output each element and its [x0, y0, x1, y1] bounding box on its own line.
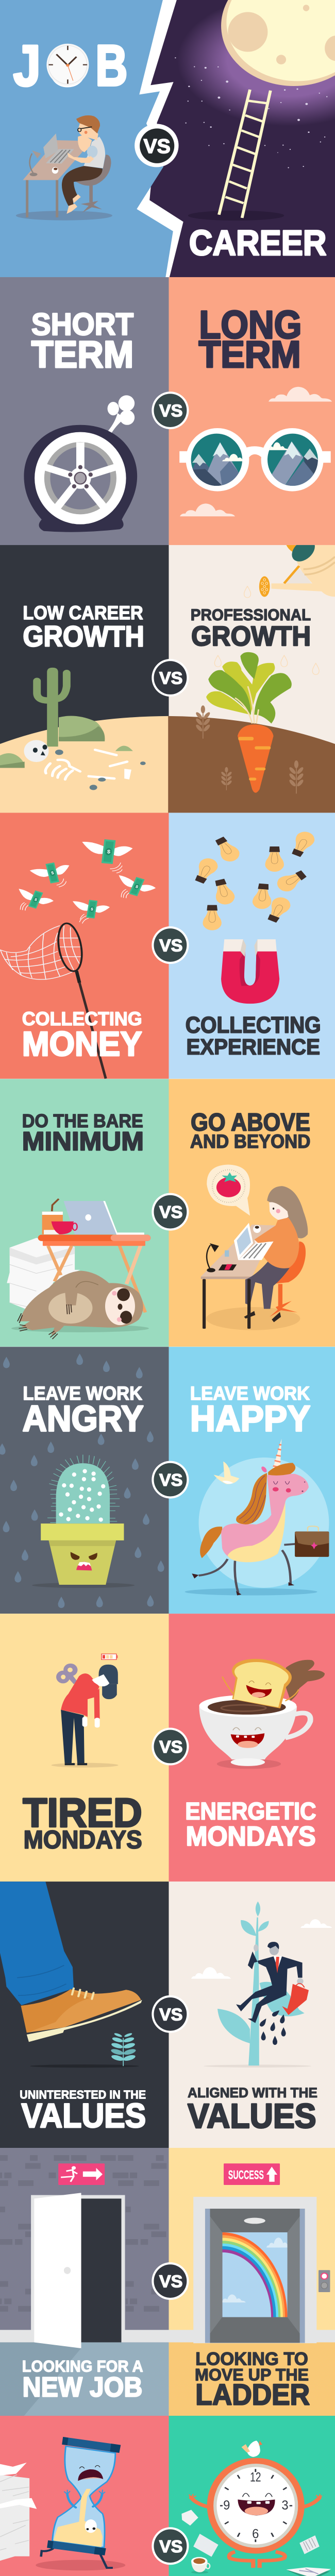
- vs badge: VS: [159, 668, 182, 688]
- heading: short term: SHORT: [31, 308, 133, 342]
- vs badge: VS: [159, 2536, 182, 2556]
- heading: leave work angry: [23, 1382, 144, 1439]
- illustration: businessman climbing plant: [236, 1942, 309, 2023]
- icon: jeans leg: [0, 1882, 74, 2005]
- heading: low career growth: LOW CAREER: [23, 602, 143, 623]
- wheat sprouts: [195, 705, 305, 793]
- panel: bare minimum vs above and beyond: [0, 1079, 335, 1347]
- vs badge: VS: [159, 2272, 182, 2291]
- stars: [175, 57, 327, 168]
- rain drops: [0, 1353, 164, 1608]
- exit sign: [58, 2163, 105, 2185]
- vs badge: [152, 926, 189, 964]
- heading: leave work angry: ANGRY: [23, 1399, 144, 1439]
- clouds: [191, 1919, 332, 1979]
- icon: flying money: [13, 837, 158, 924]
- heading: short term: TERM: [31, 333, 133, 376]
- heading: uninterested in the values: VALUES: [21, 2097, 146, 2135]
- desert ground: [0, 716, 169, 813]
- illustration: tired wind-up person: [51, 1664, 119, 1768]
- heading: looking to move up the ladder: [195, 2349, 310, 2411]
- icon: low battery: [102, 1654, 118, 1659]
- paper stack: [7, 1238, 80, 1314]
- icon: shoe: [21, 1988, 142, 2042]
- heading: looking to move up the ladder: MOVE UP THE: [195, 2365, 309, 2384]
- heading: tired mondays: TIRED: [23, 1790, 142, 1836]
- icon: small plant: [110, 2032, 137, 2066]
- heading: professional growth: [191, 606, 311, 652]
- heading: do the bare minimum: MINIMUM: [22, 1127, 144, 1156]
- heading: long term: [199, 303, 301, 376]
- paper stack: [0, 2463, 37, 2561]
- heading: collecting money: [22, 1008, 142, 1063]
- heading: job: J: [13, 34, 41, 98]
- heading: energetic mondays: [185, 1798, 316, 1852]
- panel: tired mondays vs energetic mondays: [0, 1614, 335, 1882]
- illustration: woman at desk: [201, 1186, 308, 1330]
- heading: job: [13, 33, 127, 98]
- panel: low career growth vs professional growth: [0, 536, 335, 813]
- icon: horseshoe magnet: [221, 939, 279, 1004]
- moon glow: [181, 10, 335, 124]
- icon: running hourglass: [36, 2437, 125, 2570]
- heading: go above and beyond: [190, 1109, 310, 1152]
- ground shadow: [204, 2065, 311, 2067]
- floating papers and coffee cup: [181, 2510, 331, 2576]
- heading: looking to move up the ladder: LOOKING TO: [195, 2349, 308, 2369]
- icon: happy clock: 12: [250, 2470, 261, 2484]
- icon: tomato timer speech bubble: [207, 1164, 250, 1216]
- icon: light bulbs: [191, 829, 317, 930]
- vs badge: VS: [159, 401, 182, 420]
- water drops: [214, 586, 319, 674]
- heading: uninterested in the values: UNINTERESTED IN THE: [20, 2089, 146, 2102]
- panel: leave work angry vs happy: [0, 1347, 335, 1614]
- icon: ladder: [219, 90, 271, 218]
- illustration: man at desk: [16, 115, 112, 221]
- icon: moon: [221, 0, 335, 86]
- heading: collecting money: MONEY: [22, 1025, 142, 1063]
- wall bricks: [0, 2155, 166, 2312]
- icon: happy clock: 6: [252, 2527, 259, 2541]
- heading: job: O: [48, 34, 88, 98]
- heading: looking for a new job: NEW JOB: [23, 2371, 142, 2402]
- vs badge: [152, 2262, 189, 2300]
- vs badge: [152, 392, 189, 429]
- icon: happy clock: 3: [281, 2498, 289, 2513]
- icon: angry cactus in pot: [32, 1455, 135, 1588]
- heading: collecting experience: [186, 1012, 321, 1059]
- heading: do the bare minimum: DO THE BARE: [22, 1111, 143, 1131]
- heading: long term: TERM: [199, 333, 301, 376]
- vs badge: VS: [159, 1470, 182, 1489]
- icon: growing plant: [217, 1902, 305, 2065]
- icon: carrot: [206, 652, 292, 793]
- icon: skull and bones: [24, 740, 146, 790]
- vs badge: [152, 2527, 189, 2565]
- success sign: [224, 2163, 280, 2185]
- vs badge: [152, 1995, 189, 2033]
- panel: not enough time vs fulfilling days: [0, 2416, 335, 2576]
- icon: watering can: [259, 545, 335, 597]
- vs badge: VS: [144, 135, 171, 158]
- vs badge: VS: [159, 2005, 182, 2024]
- icon: sunglasses with mountains: [179, 428, 331, 492]
- baseboard: [0, 2330, 335, 2342]
- icon: coffee cup with toast: [199, 1659, 325, 1769]
- heading: do the bare minimum: [22, 1111, 144, 1156]
- heading: looking for a new job: LOOKING FOR A: [22, 2358, 143, 2375]
- vs badge: VS: [159, 1737, 182, 1756]
- heading: leave work happy: [190, 1382, 310, 1439]
- heading: short term: [31, 308, 133, 376]
- panel: looking for a new job vs move up the ladder: [0, 2148, 335, 2416]
- panel: uninterested vs aligned with values: [0, 1882, 335, 2148]
- icon: sloth: [11, 1270, 149, 1339]
- elevator with rainbow: [154, 2197, 330, 2343]
- icon: cactus and bushes: [0, 668, 133, 768]
- soil ground: [168, 716, 335, 813]
- heading: tired mondays: [23, 1790, 142, 1854]
- vs badge: [135, 124, 179, 167]
- vs badge: [152, 1193, 189, 1231]
- heading: low career growth: GROWTH: [23, 621, 144, 653]
- heading: leave work angry: LEAVE WORK: [23, 1382, 143, 1404]
- panel: short term vs long term: [0, 277, 335, 545]
- vs badge: VS: [159, 1202, 182, 1222]
- icon: happy clock: [189, 2441, 322, 2568]
- icon: butterfly net: [1, 922, 106, 1078]
- ground shadow: [30, 2064, 139, 2067]
- clouds: [180, 387, 332, 516]
- heading: long term: LONG: [199, 303, 301, 347]
- table with laptop and cups: [38, 1199, 150, 1312]
- vs badge: [152, 659, 189, 697]
- icon: unicorn with briefcase: [185, 1439, 329, 1596]
- heading: tired mondays: MONDAYS: [24, 1826, 142, 1854]
- heading: collecting money: COLLECTING: [22, 1008, 142, 1029]
- vs badge: [152, 1728, 189, 1766]
- heading: job: B: [95, 33, 127, 98]
- vs badge: VS: [159, 936, 182, 955]
- icon: steam: [108, 395, 135, 433]
- heading: looking for a new job: [22, 2358, 143, 2402]
- water drops: [259, 2009, 286, 2045]
- heading: uninterested in the values: [20, 2089, 146, 2135]
- panel: collecting money vs collecting experience: [0, 813, 335, 1079]
- blue job background: [0, 0, 173, 277]
- icon: clock: [46, 44, 89, 86]
- vs badge: [152, 1461, 189, 1499]
- success sign: SUCCESS: [228, 2168, 264, 2182]
- icon: happy clock: 9: [223, 2498, 230, 2513]
- door frame and open door: [0, 2193, 125, 2416]
- panel: job vs career: [0, 0, 335, 277]
- white jagged divider: [137, 0, 183, 277]
- ladder shadow: [188, 211, 284, 221]
- heading: low career growth: [23, 602, 144, 653]
- icon: flat tire: [24, 425, 137, 532]
